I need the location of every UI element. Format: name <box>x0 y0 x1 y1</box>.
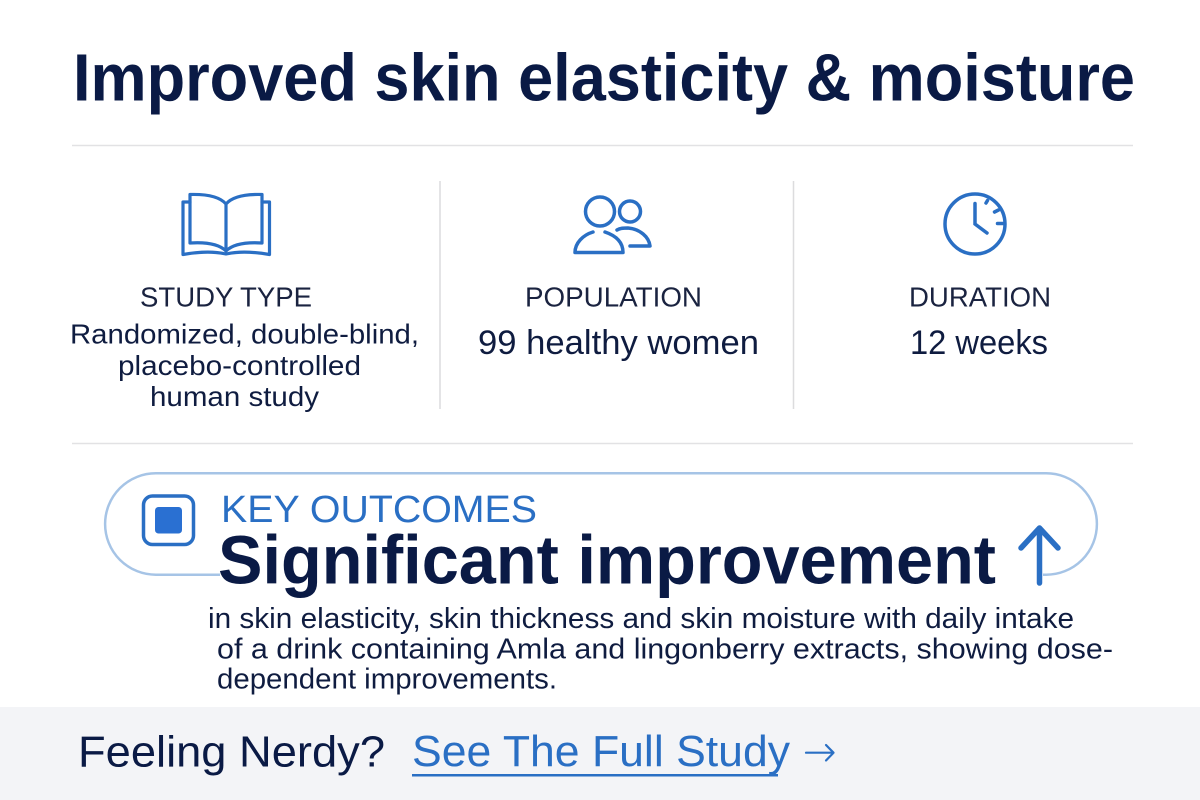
study type value: placebo-controlled <box>118 350 361 381</box>
population value: 99 healthy women <box>478 324 759 362</box>
icon: open book <box>183 194 270 254</box>
outcome description: of a drink containing Amla and lingonberry extracts, showing dose- <box>217 634 1113 666</box>
panel: duration <box>909 194 1051 362</box>
icon: people <box>575 197 650 252</box>
arrow: link <box>806 745 834 760</box>
heading: key outcomes: KEY OUTCOMES <box>221 489 537 531</box>
duration value: 12 weeks <box>910 324 1048 362</box>
panel: population <box>478 197 759 362</box>
footer prompt: Feeling Nerdy? <box>78 728 385 776</box>
arrow: up <box>1021 528 1058 583</box>
title: Improved skin elasticity & moisture <box>73 40 1135 116</box>
study type value: human study <box>150 381 319 412</box>
footer bar <box>0 707 1200 800</box>
panel: key outcomes <box>105 473 1113 696</box>
link underline <box>412 774 778 776</box>
footer link: See The Full Study <box>412 727 790 776</box>
outcome pill outline <box>105 473 1097 575</box>
outcome description: dependent improvements. <box>217 664 557 696</box>
icon: square target <box>144 496 194 544</box>
headline: significant improvement: Significant improvement <box>218 522 996 598</box>
label: population: POPULATION <box>525 282 702 312</box>
outcome description: in skin elasticity, skin thickness and skin moisture with daily intake <box>208 603 1074 635</box>
label: study type: STUDY TYPE <box>140 282 312 312</box>
study type value: Randomized, double-blind, <box>70 318 419 350</box>
study type value <box>70 318 419 412</box>
outcome description <box>208 603 1113 696</box>
panel: study type <box>70 194 419 412</box>
icon: clock <box>945 194 1005 254</box>
label: duration: DURATION <box>909 282 1051 312</box>
